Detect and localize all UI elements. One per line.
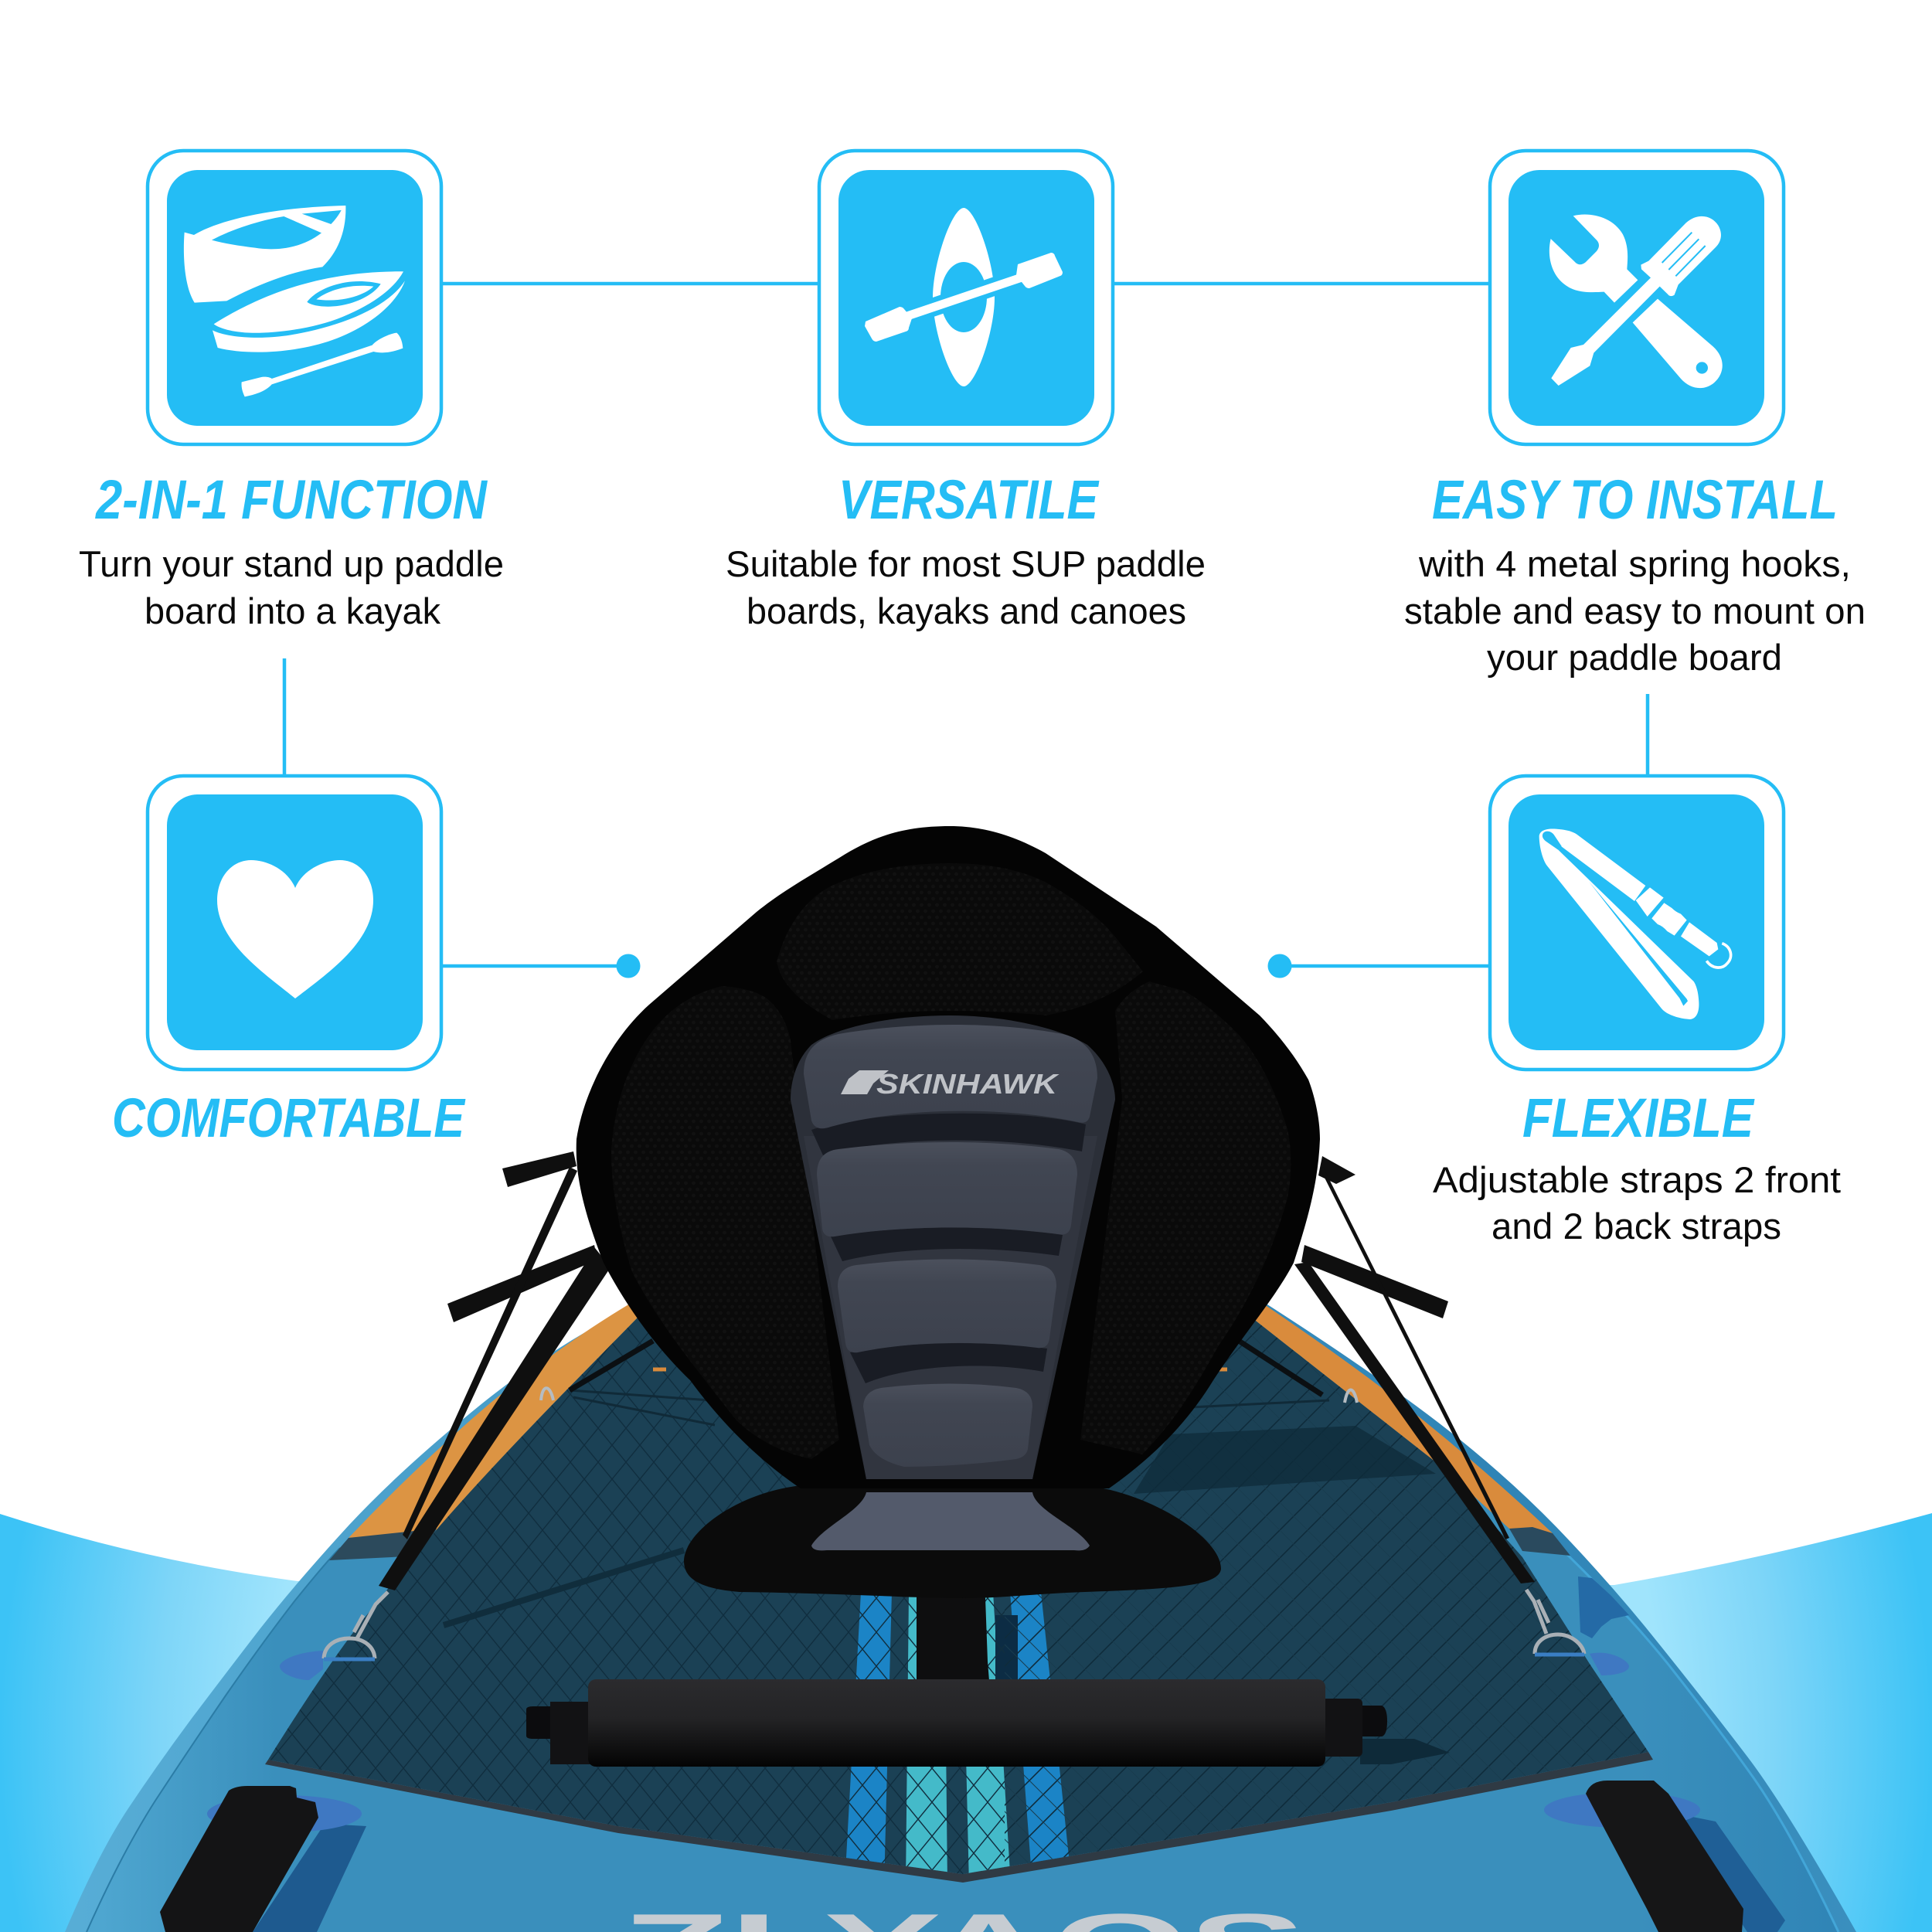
short strap ends right (1301, 1156, 1448, 1318)
shadow on right rail (1578, 1577, 1629, 1638)
icon: wrench and screwdriver (1549, 215, 1723, 388)
seat back (577, 826, 1320, 1488)
panel: comfortable (112, 776, 466, 1149)
description (1404, 543, 1866, 678)
panel: 2-in-1 function (79, 151, 504, 631)
panel: easy to install (1404, 151, 1866, 678)
small D-rings (541, 1388, 1357, 1403)
heading: FLEXIBLE (1522, 1088, 1755, 1149)
dark band right (1509, 1527, 1570, 1556)
mat cords (570, 1390, 1329, 1425)
icon background (167, 794, 423, 1050)
pad 2 (817, 1142, 1077, 1236)
rail seam left (87, 1548, 340, 1932)
carry handle left (160, 1786, 318, 1932)
pad 4 (863, 1383, 1032, 1467)
roller shadow (1360, 1739, 1450, 1764)
perforated top panel (777, 863, 1143, 1020)
grey spine (791, 1015, 1115, 1479)
description (1433, 1159, 1841, 1247)
perforated left panel (611, 986, 839, 1459)
seat base (684, 1485, 1221, 1598)
board body (65, 1294, 1856, 1932)
rear strap bar (526, 1679, 1387, 1767)
mat shadow line (444, 1550, 684, 1625)
orange marks (653, 1368, 1227, 1371)
traction mat (268, 1316, 1648, 1874)
heading: EASY TO INSTALL (1432, 470, 1838, 531)
heading: 2-IN-1 FUNCTION (94, 470, 488, 531)
connector dot right (1267, 954, 1292, 978)
seat brand logo (841, 1068, 1060, 1100)
orange rail left (349, 1301, 639, 1538)
icon frame (1490, 151, 1784, 444)
description (79, 543, 504, 631)
connector dot left (617, 954, 640, 978)
description: Adjustable straps 2 front (1433, 1159, 1841, 1200)
mat shadow right (1134, 1426, 1436, 1494)
shadow below pads (811, 1114, 1086, 1383)
description: Turn your stand up paddle (79, 543, 504, 584)
icon frame (148, 151, 441, 444)
heading: VERSATILE (838, 470, 1100, 531)
rail seam right (1558, 1546, 1838, 1932)
description: stable and easy to mount on (1404, 590, 1866, 631)
bungee straps (570, 1341, 1322, 1395)
icon background (838, 170, 1094, 426)
icon frame (1490, 776, 1784, 1070)
mat diamond texture right (1005, 1325, 1646, 1867)
description: boards, kayaks and canoes (747, 590, 1186, 631)
description: and 2 back straps (1492, 1206, 1781, 1247)
description: board into a kayak (145, 590, 440, 631)
icon frame (819, 151, 1113, 444)
handle shadow left (253, 1824, 366, 1932)
centre strap (917, 1586, 989, 1681)
thin strap left (403, 1167, 577, 1539)
suction discs upper (280, 1651, 1629, 1680)
carry handle right (1586, 1781, 1743, 1932)
handle shadow right (1669, 1812, 1785, 1932)
icon background (1509, 170, 1764, 426)
icon: boats and paddle (184, 206, 405, 396)
icon: kayak and paddle (865, 208, 1063, 386)
long strap right (1294, 1262, 1535, 1583)
mat diamond texture left (270, 1328, 1005, 1874)
icon frame (148, 776, 441, 1070)
deck stripes (270, 1325, 1646, 1874)
icon background (167, 170, 423, 426)
background wave (0, 1513, 1932, 1932)
traction mat edge (265, 1752, 1653, 1883)
icon background (1509, 794, 1764, 1050)
description: with 4 metal spring hooks, (1418, 543, 1851, 584)
icon: strap with buckle (1539, 828, 1731, 1019)
panel: versatile (726, 151, 1206, 631)
description: your paddle board (1487, 637, 1782, 678)
description (726, 543, 1206, 631)
board deck (87, 1306, 1838, 1932)
connector lines (284, 284, 1648, 966)
long strap left (379, 1248, 611, 1590)
suction disc left (207, 1795, 362, 1832)
hook left (324, 1592, 388, 1659)
perforated right panel (1080, 981, 1291, 1454)
orange rail right (1253, 1301, 1553, 1533)
dark band left (329, 1529, 437, 1560)
paddle board photo (65, 826, 1856, 1932)
heading: COMFORTABLE (112, 1088, 466, 1149)
panel: flexible (1433, 776, 1841, 1247)
pad 3 (838, 1260, 1056, 1352)
thin strap right (1320, 1167, 1509, 1539)
description: Suitable for most SUP paddle (726, 543, 1206, 584)
seat brand logo: SKINHAWK (876, 1068, 1060, 1100)
short strap ends left (447, 1151, 597, 1322)
pad 1 (804, 1025, 1097, 1128)
icon: heart (217, 860, 373, 998)
hook right (1526, 1590, 1584, 1655)
suction disc right (1544, 1792, 1700, 1828)
